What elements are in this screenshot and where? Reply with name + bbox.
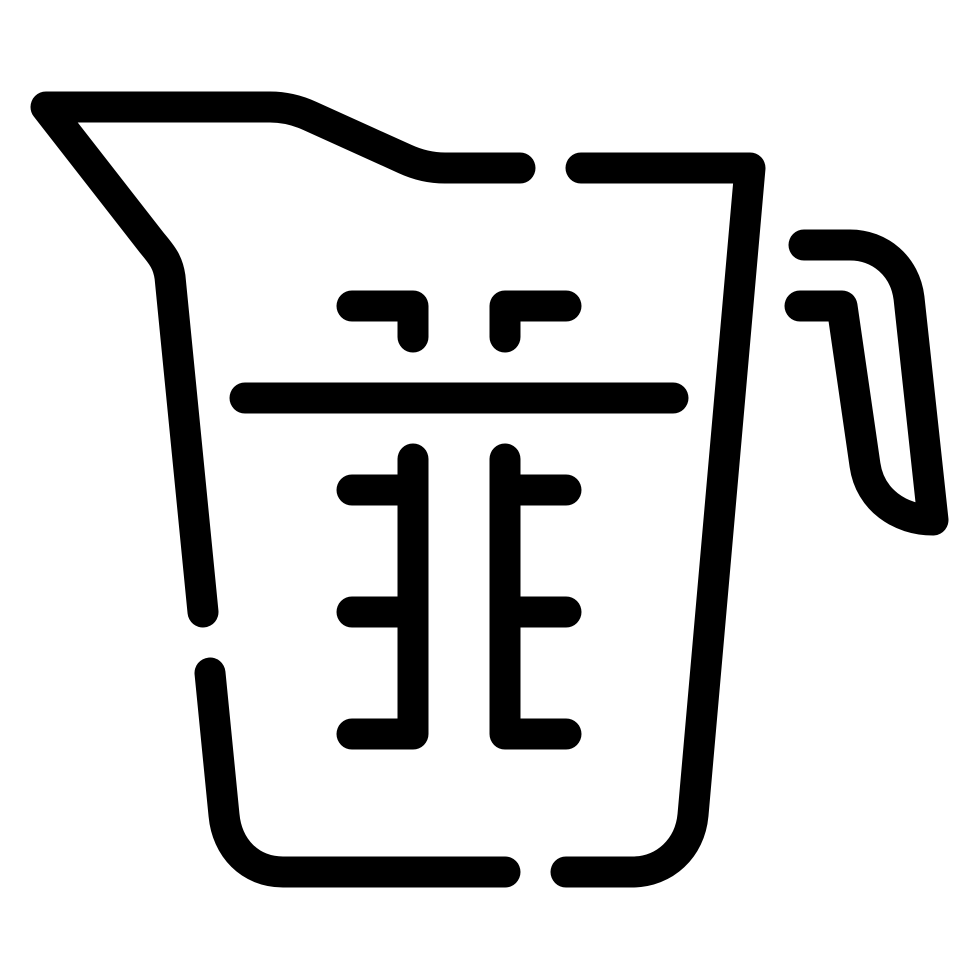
cup right wall and top rim xyxy=(566,168,750,872)
cup lower left wall and base xyxy=(210,673,505,872)
cup rim and spout with left wall xyxy=(46,107,520,612)
right scale xyxy=(505,459,566,734)
handle xyxy=(800,245,933,520)
top left tick mark xyxy=(352,306,413,337)
main fill line xyxy=(245,382,673,414)
left scale xyxy=(352,459,413,734)
top right tick mark xyxy=(505,306,566,337)
